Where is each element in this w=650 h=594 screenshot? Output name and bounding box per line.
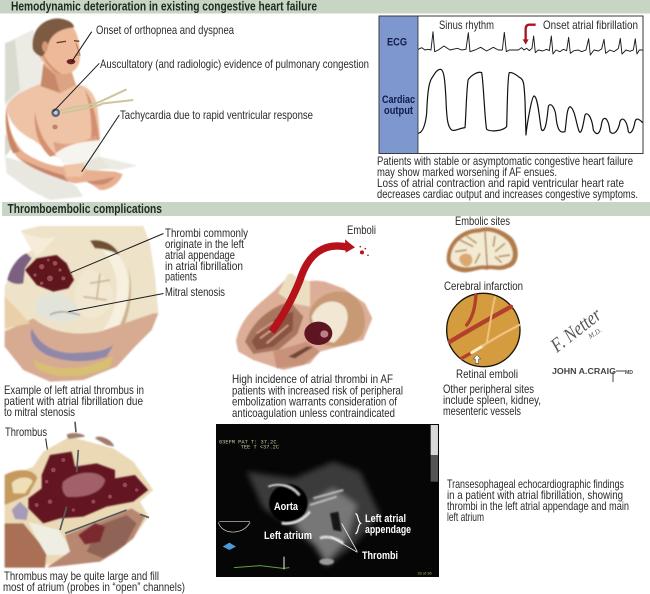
heading bar: thromboembolic complications xyxy=(2,201,650,216)
signature: Netter and Craig xyxy=(546,304,633,382)
caption: thrombus may be large: Thrombus may be quite large and fill xyxy=(4,570,159,583)
text block: other peripheral sites xyxy=(443,383,541,418)
caption: thrombus may be large: most of atrium (probes in “open” channels) xyxy=(3,581,185,594)
callout: tachycardia xyxy=(82,109,313,172)
label: cerebral infarction: Cerebral infarction xyxy=(444,280,523,293)
label: thrombus xyxy=(5,426,50,467)
blue label column: output xyxy=(384,105,413,117)
callout: thrombi origin: originate in the left xyxy=(165,238,245,251)
callout: pulmonary congestion xyxy=(53,58,369,112)
callout: orthopnea and dyspnea: Onset of orthopnea and dyspnea xyxy=(96,24,234,37)
caption: high incidence of atrial thrombi xyxy=(232,373,403,420)
sheet over waist xyxy=(55,140,100,165)
label: retinal emboli: Retinal emboli xyxy=(456,368,518,381)
grayscale bar xyxy=(431,425,438,455)
callout: thrombi origin xyxy=(71,227,248,284)
arm xyxy=(6,107,123,190)
callout: orthopnea and dyspnea xyxy=(72,24,234,62)
image: transesophageal echocardiogram: appendage xyxy=(365,524,411,536)
head xyxy=(34,20,80,74)
image: transesophageal echocardiogram: TEE T <37.2C xyxy=(241,444,279,450)
image: transesophageal echocardiogram: Thrombi xyxy=(362,550,398,562)
caption: transesophageal findings: left atrium xyxy=(447,511,484,524)
illustration: patient in bed with stethoscope xyxy=(5,18,137,200)
text block: other peripheral sites: mesenteric vessels xyxy=(443,405,521,418)
arrow: emboli path xyxy=(272,239,355,332)
label: thrombus: Thrombus xyxy=(5,426,47,439)
callout: tachycardia: Tachycardia due to rapid ventricular response xyxy=(120,109,313,122)
caption: left atrial thrombus example: Example of left atrial thrombus in xyxy=(4,384,144,397)
caption: left atrial thrombus example: to mitral stenosis xyxy=(4,406,75,419)
image: transesophageal echocardiogram: Aorta xyxy=(274,501,299,513)
caption: transesophageal findings xyxy=(447,478,629,524)
ultrasound sector xyxy=(247,462,380,567)
cardiac output trace xyxy=(418,69,643,135)
pillow xyxy=(5,29,63,107)
caption: left atrial thrombus example xyxy=(4,384,144,419)
image: transesophageal echocardiogram: Left atrium xyxy=(264,530,312,542)
callout: mitral stenosis xyxy=(68,286,225,312)
caption: high incidence of atrial thrombi: High incidence of atrial thrombi in AF xyxy=(232,373,393,386)
chart: ECG and cardiac output xyxy=(379,16,643,154)
brace and leader lines xyxy=(355,514,361,534)
image: transesophageal echocardiogram: Left atrial xyxy=(365,513,406,525)
heading bar: thromboembolic complications: Thromboembolic complications xyxy=(8,201,162,216)
callout: thrombi origin: in atrial fibrillation xyxy=(165,260,243,273)
image: transesophageal echocardiogram: 33 of 36 xyxy=(417,570,432,575)
icon: white arrow xyxy=(473,355,481,363)
blue label column: Cardiac xyxy=(382,94,415,106)
neck xyxy=(41,63,76,93)
illustration: heart cross-section with emboli arrow xyxy=(236,239,372,370)
emboli dots xyxy=(359,246,369,256)
illustration: brain section xyxy=(447,227,518,272)
illustration: large atrial thrombus specimen xyxy=(5,422,153,568)
signature: Netter and Craig: M.D. xyxy=(586,326,603,341)
illustration: left atrial thrombus specimen xyxy=(5,226,158,382)
callout: thrombi origin: Thrombi commonly xyxy=(165,227,248,240)
callout: thrombi origin: patients xyxy=(165,270,197,284)
heading bar: hemodynamic deterioration xyxy=(0,0,650,14)
signature: Netter and Craig: MD xyxy=(625,370,633,376)
callout: pulmonary congestion: Auscultatory (and radiologic) evidence of pulmonary congestion xyxy=(100,58,369,71)
blue label column xyxy=(380,16,418,153)
signature: Netter and Craig: F. Netter xyxy=(546,304,606,357)
text block: worsening with AF xyxy=(377,155,638,201)
callout: mitral stenosis: Mitral stenosis xyxy=(165,286,225,299)
caption: high incidence of atrial thrombi: embolization warrants consideration of xyxy=(232,396,398,408)
bedding xyxy=(5,157,83,200)
callout: thrombi origin: atrial appendage xyxy=(165,249,235,262)
image: transesophageal echocardiogram: 03EFM PAT T: 37.2C xyxy=(219,439,277,445)
caption: thrombus may be large xyxy=(3,570,185,594)
text block: other peripheral sites: Other peripheral sites xyxy=(443,383,534,396)
caption: left atrial thrombus example: patient with atrial fibrillation due xyxy=(4,395,143,408)
caption: high incidence of atrial thrombi: anticoagulation unless contraindicated xyxy=(232,407,395,420)
caption: high incidence of atrial thrombi: patients with increased risk of peripheral xyxy=(232,384,403,398)
arrow: onset of atrial fibrillation xyxy=(523,25,536,45)
blue label column: ECG xyxy=(387,36,407,48)
label: emboli: Emboli xyxy=(347,224,376,237)
image: transesophageal echocardiogram xyxy=(216,424,439,577)
text block: other peripheral sites: include spleen, kidney, xyxy=(443,394,541,407)
text block: worsening with AF: may show marked worsening if AF ensues. xyxy=(377,166,557,179)
stethoscope xyxy=(58,89,133,113)
illustration: retinal emboli xyxy=(447,293,520,367)
label: embolic sites: Embolic sites xyxy=(455,215,510,228)
chart: ECG and cardiac output: Sinus rhythm xyxy=(439,19,494,32)
signature: Netter and Craig: JOHN A.CRAIG xyxy=(552,367,616,376)
torso xyxy=(7,83,100,157)
ECG trace xyxy=(418,32,643,55)
